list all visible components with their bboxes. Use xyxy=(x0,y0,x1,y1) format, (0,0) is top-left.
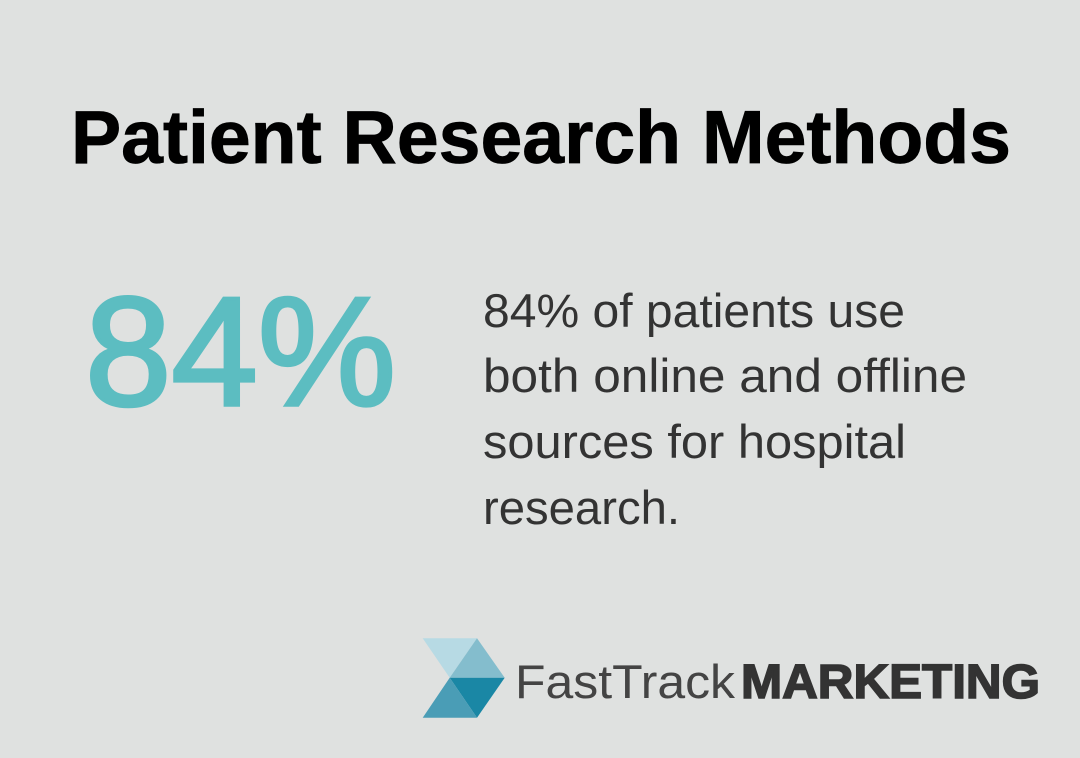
description text block: both online and offline xyxy=(483,349,967,402)
title: Patient Research Methods xyxy=(71,95,1011,179)
description text block: sources for hospital xyxy=(483,415,906,468)
logo wordmark: MARKETING: MARKETING xyxy=(741,656,1040,709)
logo wordmark: FastTrack: FastTrack xyxy=(515,655,736,708)
description text block xyxy=(483,284,967,534)
icon: logo chevron xyxy=(423,638,505,718)
description text block: 84% of patients use xyxy=(483,284,905,337)
big statistic: 84%: 84% xyxy=(85,265,396,438)
logo: FastTrack Marketing xyxy=(423,638,1040,718)
description text block: research. xyxy=(483,481,680,534)
